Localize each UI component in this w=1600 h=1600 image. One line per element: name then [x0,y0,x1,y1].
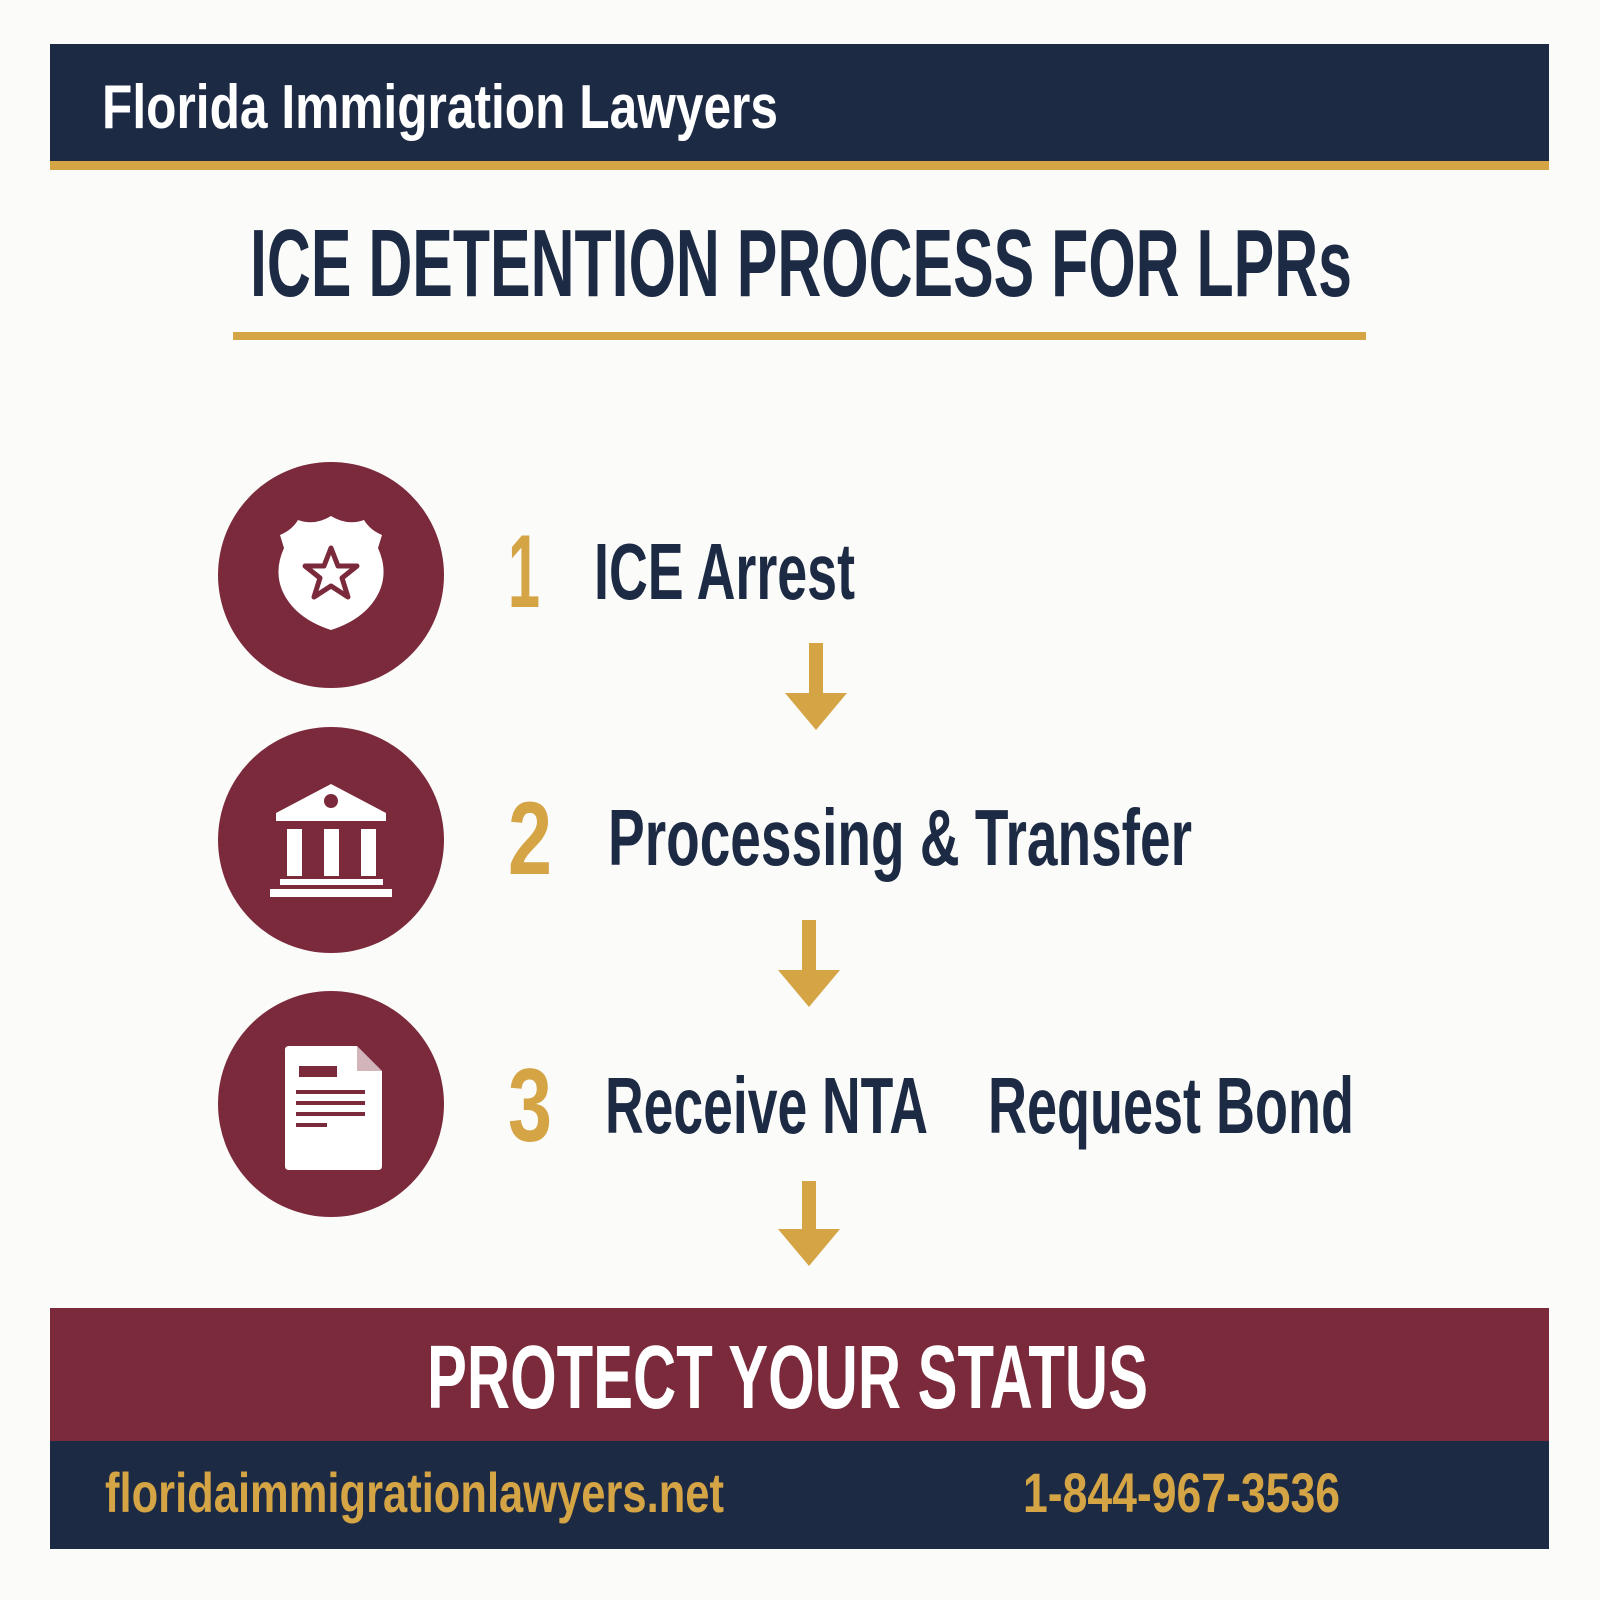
phone: 1-844-967-3536 [1023,1461,1340,1524]
footer [50,1441,1549,1549]
banner: protect your status: PROTECT YOUR STATUS [427,1328,1148,1428]
number 2: 2 [508,781,552,897]
icon: courthouse [218,727,444,953]
header text: Florida Immigration Lawyers [102,73,778,142]
website: floridaimmigrationlawyers.net [105,1461,724,1524]
step 3 [218,991,1354,1217]
header bar [50,44,1549,170]
banner: protect your status [50,1308,1549,1442]
number 1: 1 [508,514,540,630]
step 3: Request Bond [988,1061,1354,1150]
step text: ICE Arrest [594,527,855,616]
number 3: 3 [508,1048,552,1164]
icon: document [218,991,444,1217]
step 2 [218,727,1192,953]
step text: Receive NTA [605,1061,928,1150]
title [233,210,1366,340]
arrow 3 [778,1181,840,1266]
step 1 [218,462,855,688]
icon: badge [218,462,444,688]
arrow 1 [785,643,847,730]
step text: Processing & Transfer [608,793,1192,882]
arrow 2 [778,920,840,1007]
